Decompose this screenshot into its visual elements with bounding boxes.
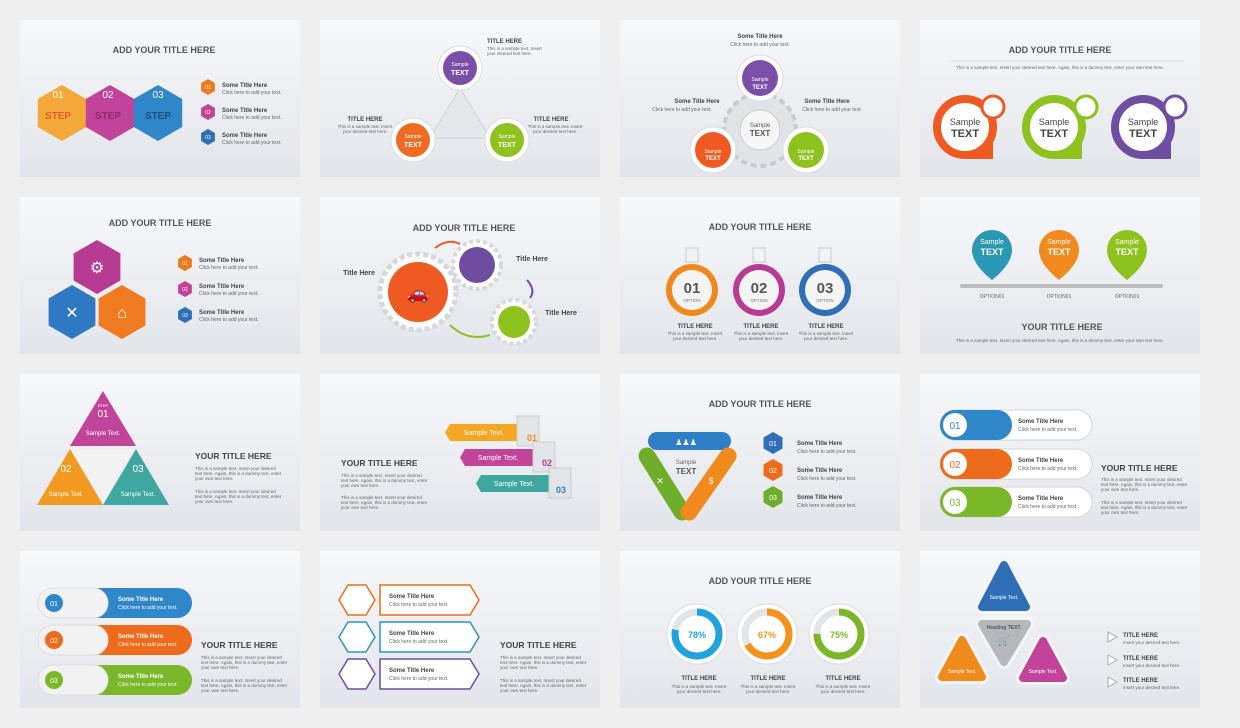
donuts: 78% — [688, 630, 706, 640]
slide 6: gears transport — [320, 197, 600, 354]
circles: Sample — [452, 62, 469, 68]
list: 01 — [205, 85, 211, 91]
slide 10: ribbons and cubes: your own text here. — [341, 505, 379, 510]
slide 3: gear circles — [620, 20, 900, 177]
slide 15: donut charts: This is a sample text. Insert — [816, 684, 871, 689]
slide 14: outlined hexagon arrows: This is a sample text. Insert your desired — [500, 655, 581, 660]
donuts — [667, 604, 869, 664]
rings: Sample — [1039, 117, 1069, 127]
slide 5: hexagon icons — [20, 197, 300, 354]
triangle shape: ♟♟♟ — [675, 438, 697, 447]
slide 16: rounded triangles — [920, 551, 1200, 708]
list: Click here to add your text. — [222, 90, 281, 96]
slide 5: hexagon icons: ADD YOUR TITLE HERE — [109, 218, 211, 228]
list: Click here to add your text. — [222, 140, 281, 146]
slide 7: tags 01 02 03: your desired text here. — [804, 336, 848, 341]
tags: 03 — [817, 280, 833, 297]
slide 10: ribbons and cubes — [320, 374, 600, 531]
slide 13: pills left: This is a sample text. Insert your desired — [201, 678, 282, 683]
circles: TEXT — [752, 85, 768, 91]
gears — [380, 241, 536, 344]
ribbons — [445, 416, 571, 498]
texts: Click here to add your text. — [652, 107, 712, 113]
list: 02 — [769, 468, 777, 475]
triangle shape: TEXT — [676, 467, 696, 476]
texts: TITLE HERE — [347, 117, 383, 123]
rings: TEXT — [951, 128, 979, 140]
hexagon steps: STEP — [145, 111, 171, 122]
arrow boxes — [339, 585, 479, 689]
tags: 02 — [751, 280, 767, 297]
list: 01 — [182, 261, 188, 267]
ribbons: Sample Text. — [494, 481, 534, 488]
slide 13: pills left: your own text here. — [201, 665, 239, 670]
pills: 03 — [50, 678, 58, 685]
pills: Some Title Here — [118, 674, 164, 680]
hexagon steps — [38, 85, 182, 141]
texts: Click here to add your text. — [802, 107, 862, 113]
slide 12: pill bars — [920, 374, 1200, 531]
pills: 03 — [949, 498, 961, 509]
list: Insert your desired text here. — [1123, 663, 1180, 668]
slide 15: donut charts: your desired text here. — [746, 689, 790, 694]
pills: Click here to add your text. — [1018, 427, 1077, 433]
list: Some Title Here — [199, 310, 245, 316]
hexagon steps: 02 — [102, 90, 114, 101]
pills: 02 — [949, 460, 961, 471]
hexagon steps: 01 — [52, 90, 64, 101]
slide 15: donut charts: TITLE HERE — [825, 676, 861, 682]
list — [178, 255, 258, 323]
circles: TEXT — [404, 142, 423, 149]
texts: This is a sample text. Insert — [338, 124, 393, 129]
slide 9: triangle pyramid: This is a sample text. Insert your desired — [195, 489, 276, 494]
pills — [940, 410, 1092, 517]
pins: Sample — [1047, 239, 1071, 246]
slide 7: tags 01 02 03: This is a sample text. Insert — [799, 331, 854, 336]
slide 7: tags 01 02 03: your desired text here. — [739, 336, 783, 341]
list: Click here to add your text. — [797, 476, 856, 482]
triangle shape: $ — [708, 476, 714, 486]
hexagons: ⌂ — [117, 305, 127, 322]
slide 9: triangle pyramid: your own text here. — [195, 476, 233, 481]
list: Click here to add your text. — [199, 317, 258, 323]
pills: Some Title Here — [1018, 458, 1064, 464]
hexagons — [49, 240, 145, 339]
texts: Some Title Here — [737, 34, 783, 40]
slide 8: pins timeline: This is a sample text. Insert your desired text here. Again, this is a dummy text, enter your own text here. — [956, 338, 1164, 343]
list — [1108, 632, 1180, 690]
list: Click here to add your text. — [199, 265, 258, 271]
slide 11: triangle cycle: ADD YOUR TITLE HERE — [709, 399, 811, 409]
slide 15: donut charts: ADD YOUR TITLE HERE — [709, 576, 811, 586]
texts: Some Title Here — [674, 99, 720, 105]
list: Some Title Here — [222, 133, 268, 139]
arrow boxes: Some Title Here — [389, 668, 435, 674]
slide 15: donut charts: This is a sample text. Insert — [672, 684, 727, 689]
texts: your desired text here. — [533, 129, 577, 134]
pins — [972, 230, 1147, 280]
texts — [338, 39, 583, 134]
list: Click here to add your text. — [797, 449, 856, 455]
slide 12: pill bars: This is a sample text. Insert your desired — [1101, 477, 1182, 482]
triangles: 02 — [60, 464, 72, 475]
slide 12: pill bars: YOUR TITLE HERE — [1101, 463, 1178, 473]
slide 11: triangle cycle — [620, 374, 900, 531]
circles: Sample — [499, 134, 516, 140]
pills: Click here to add your text. — [118, 682, 177, 688]
list: Click here to add your text. — [797, 503, 856, 509]
ribbons: Sample Text. — [478, 455, 518, 462]
rings — [937, 96, 1186, 159]
texts: Some Title Here — [804, 99, 850, 105]
slide 15: donut charts: your desired text here. — [677, 689, 721, 694]
list: Some Title Here — [797, 441, 843, 447]
slide 8: pins timeline: OPTION01 — [980, 294, 1005, 300]
triangles: Heading TEXT. — [987, 625, 1022, 631]
triangles: 🛒 — [998, 634, 1010, 647]
slide 8: pins timeline: OPTION01 — [1115, 294, 1140, 300]
pills: 01 — [50, 601, 58, 608]
gear — [724, 94, 796, 166]
list: 03 — [205, 135, 211, 141]
list: Some Title Here — [222, 83, 268, 89]
list: Click here to add your text. — [199, 291, 258, 297]
slide 10: ribbons and cubes: YOUR TITLE HERE — [341, 458, 418, 468]
circles: Sample — [752, 77, 769, 83]
slide 1: hexagon steps — [20, 20, 300, 177]
slide 10: ribbons and cubes: This is a sample text. Insert your desired — [341, 473, 422, 478]
list: 02 — [182, 287, 188, 293]
arrow boxes: Click here to add your text. — [389, 676, 448, 682]
circles: Sample — [705, 149, 722, 155]
list: Some Title Here — [199, 258, 245, 264]
slide 14: outlined hexagon arrows: This is a sample text. Insert your desired — [500, 678, 581, 683]
list: Some Title Here — [797, 468, 843, 474]
slide 9: triangle pyramid: YOUR TITLE HERE — [195, 451, 272, 461]
pills — [38, 588, 192, 695]
texts: your desired text here. — [487, 51, 532, 56]
slide 13: pills left: text here. Again, this is a dummy text, enter — [201, 660, 288, 665]
pins: Sample — [1115, 239, 1139, 246]
triangles: Sample Text. — [990, 595, 1018, 601]
list: Click here to add your text. — [222, 115, 281, 121]
slide 6: gears transport: Title Here — [545, 310, 577, 317]
circles — [391, 46, 529, 162]
slide 15: donut charts: your desired text here. — [821, 689, 865, 694]
pins: TEXT — [980, 247, 1004, 257]
pins: Sample — [980, 239, 1004, 246]
list: Insert your desired text here. — [1123, 685, 1180, 690]
arrow boxes: Some Title Here — [389, 631, 435, 637]
triangles: STEP — [98, 403, 109, 408]
arrow boxes: Click here to add your text. — [389, 639, 448, 645]
list: Some Title Here — [199, 284, 245, 290]
slide 12: pill bars: text here. Again, this is a dummy text, enter — [1101, 505, 1188, 510]
slide 9: triangle pyramid: This is a sample text. Insert your desired — [195, 466, 276, 471]
slide 10: ribbons and cubes: text here. Again, this is a dummy text, enter — [341, 478, 428, 483]
slide 13: pills left: your own text here. — [201, 688, 239, 693]
slide 9: triangle pyramid — [20, 374, 300, 531]
slide 12: pill bars: This is a sample text. Insert your desired — [1101, 500, 1182, 505]
slide 3: gear circles: TEXT — [750, 129, 770, 138]
list: Some Title Here — [797, 495, 843, 501]
rings: Sample — [950, 117, 980, 127]
slide 4: speech bubble rings: This is a sample text. Insert your desired text here. Again, this is a dummy text, enter your own text here. — [956, 65, 1164, 70]
slide 7: tags 01 02 03: This is a sample text. Insert — [668, 331, 723, 336]
slide 14: outlined hexagon arrows: text here. Again, this is a dummy text, enter — [500, 683, 587, 688]
gears: 🚗 — [407, 283, 429, 303]
arrow boxes: Click here to add your text. — [389, 602, 448, 608]
pins: TEXT — [1115, 247, 1139, 257]
ribbons: 02 — [542, 458, 552, 468]
slide 9: triangle pyramid: text here. Again, this is a dummy text, enter — [195, 494, 282, 499]
texts: TITLE HERE — [533, 117, 569, 123]
triangles: Sample Text. — [49, 492, 84, 498]
circles: TEXT — [705, 156, 721, 162]
list: TITLE HERE — [1123, 656, 1158, 662]
slide 9: triangle pyramid: your own text here. — [195, 499, 233, 504]
slide 14: outlined hexagon arrows — [320, 551, 600, 708]
circles: TEXT — [498, 142, 517, 149]
slide 8: pins timeline: YOUR TITLE HERE — [1021, 322, 1103, 332]
list: TITLE HERE — [1123, 678, 1158, 684]
list: Some Title Here — [222, 108, 268, 114]
rings: TEXT — [1129, 128, 1157, 140]
title: ADD YOUR TITLE HERE — [1009, 45, 1111, 55]
slide 7: tags 01 02 03: TITLE HERE — [808, 324, 844, 330]
triangles — [942, 565, 1063, 678]
triangle shape: ✕ — [656, 476, 664, 486]
circles — [690, 55, 829, 173]
slide 13: pills left: This is a sample text. Insert your desired — [201, 655, 282, 660]
slide 14: outlined hexagon arrows: your own text here. — [500, 665, 538, 670]
pills: Some Title Here — [118, 634, 164, 640]
slide 14: outlined hexagon arrows: text here. Again, this is a dummy text, enter — [500, 660, 587, 665]
donuts: 67% — [758, 630, 776, 640]
tags: OPTION — [750, 298, 768, 303]
slide 3: gear circles: Sample — [750, 123, 771, 129]
list: 03 — [769, 495, 777, 502]
slide 13: pills left — [20, 551, 300, 708]
tags — [666, 248, 851, 316]
slide 13: pills left: YOUR TITLE HERE — [201, 640, 278, 650]
slide 13: pills left: text here. Again, this is a dummy text, enter — [201, 683, 288, 688]
slide 8: pins timeline: OPTION01 — [1047, 294, 1072, 300]
pills: 02 — [50, 638, 58, 645]
triangles: Sample Text. — [121, 492, 156, 498]
texts: TITLE HERE — [487, 39, 522, 45]
pills: 01 — [949, 421, 961, 432]
arrow boxes: Some Title Here — [389, 594, 435, 600]
slide 8: pins timeline — [920, 197, 1200, 354]
slide 10: ribbons and cubes: your own text here. — [341, 483, 379, 488]
pills: Click here to add your text. — [118, 605, 177, 611]
triangle shape — [647, 438, 728, 512]
hexagon steps: STEP — [45, 111, 71, 122]
donuts: 75% — [830, 630, 848, 640]
pills: Click here to add your text. — [118, 642, 177, 648]
circles: TEXT — [451, 70, 470, 77]
slide 14: outlined hexagon arrows: YOUR TITLE HERE — [500, 640, 577, 650]
triangles: 01 — [97, 409, 109, 420]
triangles: Sample Text. — [948, 669, 976, 675]
pills: Click here to add your text. — [1018, 504, 1077, 510]
slide 6: gears transport: Title Here — [343, 270, 375, 277]
slide 7: tags 01 02 03: your desired text here. — [673, 336, 717, 341]
ribbons: 01 — [527, 433, 537, 443]
tags: OPTION — [683, 298, 701, 303]
hexagon steps: STEP — [95, 111, 121, 122]
slide 7: tags 01 02 03: TITLE HERE — [677, 324, 713, 330]
slide 10: ribbons and cubes: This is a sample text. Insert your desired — [341, 495, 422, 500]
rings: TEXT — [1040, 128, 1068, 140]
list: 01 — [769, 441, 777, 448]
list: TITLE HERE — [1123, 633, 1158, 639]
title: ADD YOUR TITLE HERE — [113, 45, 215, 55]
circles: Sample — [798, 149, 815, 155]
pills: Click here to add your text. — [1018, 466, 1077, 472]
slide 10: ribbons and cubes: text here. Again, this is a dummy text, enter — [341, 500, 428, 505]
texts: your desired text here. — [343, 129, 387, 134]
slide 6: gears transport: Title Here — [516, 256, 548, 263]
slide 14: outlined hexagon arrows: your own text here. — [500, 688, 538, 693]
circles: Sample — [405, 134, 422, 140]
tags: 01 — [684, 280, 700, 297]
slide 12: pill bars: your own text here. — [1101, 510, 1139, 515]
slide 15: donut charts — [620, 551, 900, 708]
slide 2: three circles — [320, 20, 600, 177]
pins: TEXT — [1047, 247, 1071, 257]
slide 12: pill bars: your own text here. — [1101, 487, 1139, 492]
slide 7: tags 01 02 03: TITLE HERE — [743, 324, 779, 330]
texts: This is a sample text. Insert — [528, 124, 583, 129]
list — [764, 432, 856, 509]
slide 6: gears transport: ADD YOUR TITLE HERE — [413, 223, 515, 233]
ribbons: 03 — [556, 485, 566, 495]
slide 15: donut charts: This is a sample text. Insert — [741, 684, 796, 689]
ribbons: Sample Text. — [464, 430, 504, 437]
hexagons: ⚙ — [90, 260, 104, 277]
slide 7: tags 01 02 03: ADD YOUR TITLE HERE — [709, 222, 811, 232]
texts: Click here to add your text. — [730, 42, 790, 48]
slide 15: donut charts: TITLE HERE — [681, 676, 717, 682]
slide 4: speech bubble rings — [920, 20, 1200, 177]
texts — [652, 34, 862, 113]
list — [201, 79, 281, 146]
tags: OPTION — [816, 298, 834, 303]
circles: TEXT — [798, 156, 814, 162]
triangles: Sample Text. — [1029, 669, 1057, 675]
slide 15: donut charts: TITLE HERE — [750, 676, 786, 682]
slide 9: triangle pyramid: text here. Again, this is a dummy text, enter — [195, 471, 282, 476]
list: 02 — [205, 110, 211, 116]
triangles: 03 — [132, 464, 144, 475]
pills: Some Title Here — [118, 597, 164, 603]
list: Insert your desired text here. — [1123, 640, 1180, 645]
texts: This is a sample text. Insert — [487, 46, 543, 51]
hexagons: ✕ — [65, 305, 79, 322]
pills: Some Title Here — [1018, 496, 1064, 502]
hexagon steps: 03 — [152, 90, 164, 101]
slide 7: tags 01 02 03: This is a sample text. Insert — [734, 331, 789, 336]
triangles — [37, 391, 169, 505]
triangle shape: Sample — [676, 460, 697, 466]
pills: Some Title Here — [1018, 419, 1064, 425]
triangles: Sample Text. — [86, 431, 121, 437]
rings: Sample — [1128, 117, 1158, 127]
list: 03 — [182, 313, 188, 319]
slide 7: tags 01 02 03 — [620, 197, 900, 354]
slide 12: pill bars: text here. Again, this is a dummy text, enter — [1101, 482, 1188, 487]
